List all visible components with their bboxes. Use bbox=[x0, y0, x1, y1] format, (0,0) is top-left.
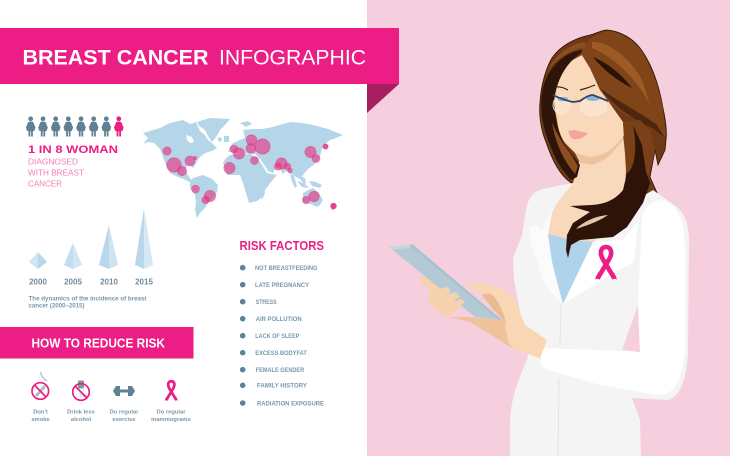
coat bbox=[510, 183, 689, 456]
hair left side bbox=[541, 50, 582, 180]
tablet bbox=[389, 244, 502, 320]
neck and chest bbox=[548, 135, 628, 243]
icon labels: exercise bbox=[112, 417, 136, 423]
right hand bbox=[467, 283, 547, 358]
icon labels: Drink less bbox=[67, 410, 95, 416]
glasses bbox=[553, 95, 608, 116]
icon row: eight women bbox=[26, 116, 124, 136]
risk factors list: EXCESS BODYFAT bbox=[255, 351, 307, 357]
how to reduce risk banner: HOW TO REDUCE RISK bbox=[32, 336, 166, 350]
icon labels: alcohol bbox=[71, 417, 92, 423]
risk factors list: FAMILY HISTORY bbox=[257, 384, 307, 390]
hair left highlight bbox=[552, 122, 578, 174]
shirt bbox=[548, 234, 593, 304]
strand highlight bbox=[576, 215, 608, 229]
year labels bbox=[29, 278, 153, 286]
hair sweep highlight bbox=[592, 42, 650, 105]
chart caption: The dynamics of the incidence of breast bbox=[28, 296, 147, 302]
chin shadow bbox=[575, 135, 624, 165]
title banner: INFOGRAPHIC bbox=[219, 46, 366, 70]
risk factors list: STRESS bbox=[256, 300, 277, 306]
icon labels bbox=[31, 410, 191, 423]
risk factors list: AIR POLLUTION bbox=[256, 317, 302, 323]
title banner: BREAST CANCER bbox=[22, 46, 209, 70]
pyramid chart: incidence 2000-2015 bbox=[29, 208, 153, 286]
statistic: 1 in 8 women: DIAGNOSED bbox=[28, 156, 78, 166]
icon labels: smoke bbox=[31, 417, 50, 423]
left hand fingers bbox=[428, 287, 465, 317]
year labels: 2000 bbox=[29, 278, 47, 286]
risk factors list bbox=[240, 265, 324, 408]
risk factors list: NOT BREASTFEEDING bbox=[255, 266, 318, 272]
statistic: 1 in 8 women bbox=[26, 116, 124, 188]
year labels: 2015 bbox=[135, 278, 153, 286]
hair sweep bbox=[581, 31, 666, 139]
chart caption: cancer (2000–2015) bbox=[28, 303, 84, 310]
continents bbox=[143, 118, 343, 218]
risk factors list: LACK OF SLEEP bbox=[255, 334, 299, 340]
icon labels: Do regular bbox=[110, 410, 139, 416]
ribbon pin bbox=[595, 247, 617, 280]
incidence bubbles bbox=[163, 135, 336, 209]
pyramid 2000 bbox=[29, 252, 47, 269]
pyramid 2015 bbox=[135, 208, 153, 269]
right pink panel bbox=[367, 0, 730, 456]
coat seam bbox=[558, 304, 561, 456]
lips bbox=[568, 130, 588, 139]
left forearm bbox=[448, 317, 512, 348]
statistic: 1 in 8 women: CANCER bbox=[28, 178, 62, 188]
icon: no smoking bbox=[32, 372, 49, 399]
hair back bbox=[540, 30, 666, 215]
chart caption bbox=[28, 296, 147, 310]
statistic: 1 in 8 women: WITH BREAST bbox=[28, 168, 84, 178]
risk factors list: FEMALE GENDER bbox=[256, 368, 305, 374]
sleeve right bbox=[633, 200, 685, 395]
lapel right bbox=[563, 222, 638, 304]
icon labels: Don't bbox=[33, 410, 48, 416]
icon labels: mammograms bbox=[151, 417, 191, 423]
how to reduce risk banner bbox=[0, 327, 194, 358]
illustration: doctor bbox=[389, 30, 689, 456]
eyebrows bbox=[555, 85, 595, 90]
risk-reduction icons bbox=[31, 372, 191, 423]
right thumb shadow bbox=[482, 293, 506, 326]
icon labels: Do regular bbox=[156, 410, 186, 416]
pyramid 2010 bbox=[99, 225, 118, 269]
year labels: 2010 bbox=[100, 278, 118, 286]
side gap bbox=[622, 305, 640, 352]
sleeve front bbox=[540, 348, 657, 395]
face bbox=[553, 55, 624, 157]
icon: dumbbell bbox=[113, 386, 135, 396]
icon: ribbon bbox=[165, 381, 178, 401]
hair sweep dark bbox=[593, 57, 632, 88]
world map bbox=[143, 118, 343, 218]
long strand bbox=[566, 125, 650, 258]
left hand palm and thumb bbox=[420, 276, 465, 317]
hair lower band bbox=[600, 88, 665, 138]
bullets bbox=[240, 265, 246, 406]
lapel left bbox=[530, 207, 562, 305]
long strand brown bbox=[623, 120, 655, 205]
hudson bay bbox=[186, 135, 194, 143]
pyramid 2005 bbox=[64, 243, 82, 269]
title banner bbox=[0, 28, 399, 113]
year labels: 2005 bbox=[64, 278, 82, 286]
risk factors heading: RISK FACTORS bbox=[240, 239, 324, 253]
statistic: 1 in 8 women: 1 IN 8 WOMAN bbox=[28, 144, 118, 156]
risk factors list: LATE PREGNANCY bbox=[255, 283, 309, 289]
icon: no alcohol bbox=[73, 380, 89, 400]
risk factors list: RADIATION EXPOSURE bbox=[257, 402, 324, 408]
